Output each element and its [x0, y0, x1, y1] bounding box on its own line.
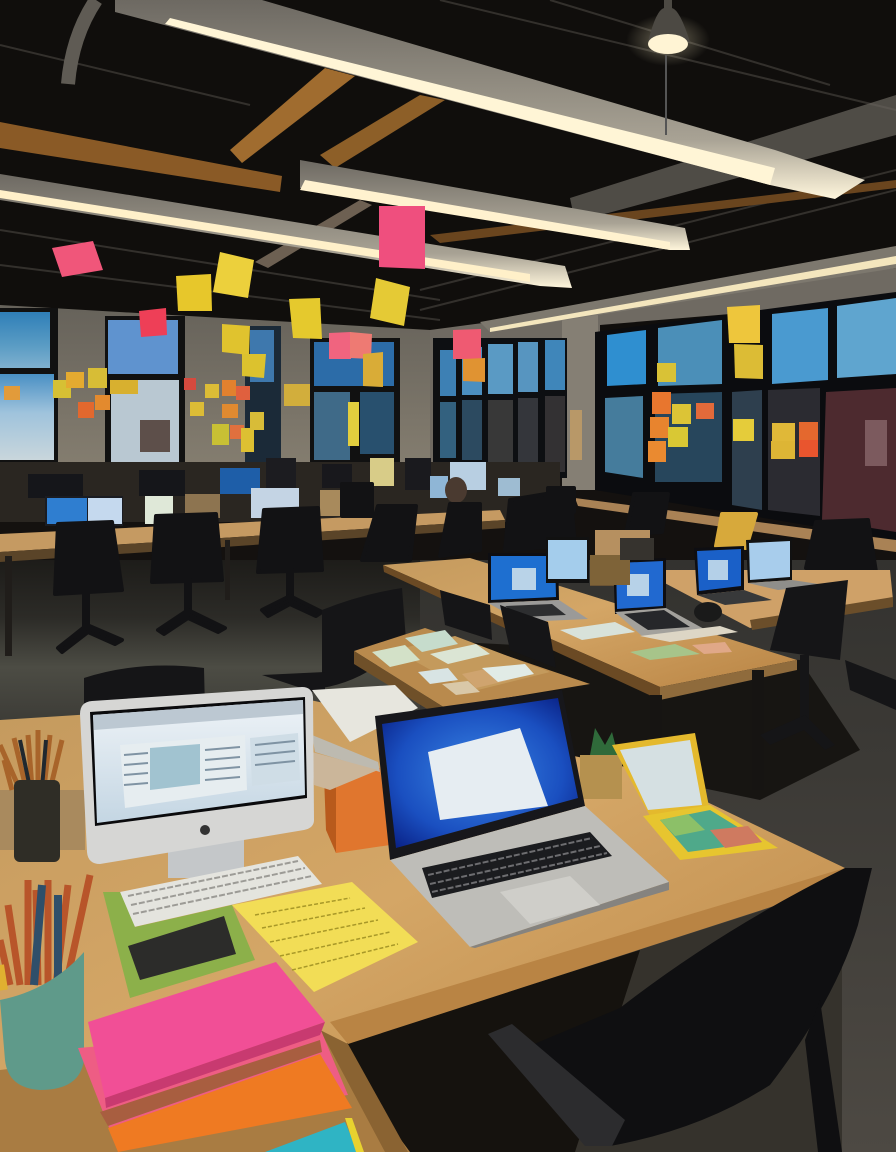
stacked boxes and plant	[312, 685, 622, 853]
window far left	[0, 308, 58, 464]
windows	[0, 292, 896, 540]
chair 6	[505, 490, 575, 550]
light fixture: middle	[300, 160, 690, 250]
chair 1	[55, 522, 122, 652]
chair 8	[806, 520, 876, 572]
near chair behind desks	[84, 580, 896, 750]
light fixture: right	[480, 246, 896, 332]
yellow tablet case	[612, 733, 778, 860]
foreground office chair	[488, 868, 872, 1152]
ceiling pipe	[68, 0, 96, 84]
floor	[0, 560, 896, 1152]
laptop 1	[488, 553, 588, 622]
chair 7	[626, 494, 668, 534]
ceiling	[0, 0, 896, 340]
green notebook	[103, 892, 255, 998]
window left centre	[105, 316, 185, 466]
keyboard	[120, 856, 322, 927]
foreground iMac	[80, 687, 314, 878]
window right of centre	[433, 338, 567, 478]
sticky notes on right windows	[570, 392, 818, 462]
window centre	[310, 338, 400, 464]
wooden beams	[0, 68, 896, 268]
laptop 2	[546, 537, 589, 583]
pencil cup front	[0, 875, 90, 1090]
desk clutter	[590, 555, 630, 585]
far desks row with monitors	[0, 458, 896, 656]
chair 5	[440, 504, 480, 556]
dark shadow between desks	[420, 640, 860, 800]
laptop 3	[613, 558, 706, 636]
window centre small	[245, 326, 281, 462]
foreground laptop	[375, 690, 669, 948]
yellow chair	[716, 514, 756, 548]
middle-ground laptops	[488, 537, 825, 660]
far office chairs	[55, 484, 876, 652]
middle desk cluster	[383, 530, 893, 790]
light fixture: large front	[115, 0, 865, 199]
yellow notepad	[232, 882, 418, 992]
colored paper stack	[78, 962, 364, 1152]
hanging sticky notes	[52, 206, 763, 387]
light fixture: left	[0, 174, 572, 288]
laptop 4	[694, 546, 772, 605]
pencil holder back	[0, 730, 62, 862]
small table with papers	[354, 628, 590, 720]
under-desk shadow	[345, 885, 842, 1152]
chair 3	[258, 508, 322, 616]
laptop 5	[746, 538, 825, 590]
chair 4	[362, 506, 416, 560]
sticky notes on wall left	[4, 368, 359, 452]
foreground desk	[0, 700, 845, 1152]
large window right	[595, 292, 896, 540]
chair 2	[152, 514, 225, 634]
back wall	[0, 268, 896, 490]
pendant lamp	[626, 0, 710, 135]
